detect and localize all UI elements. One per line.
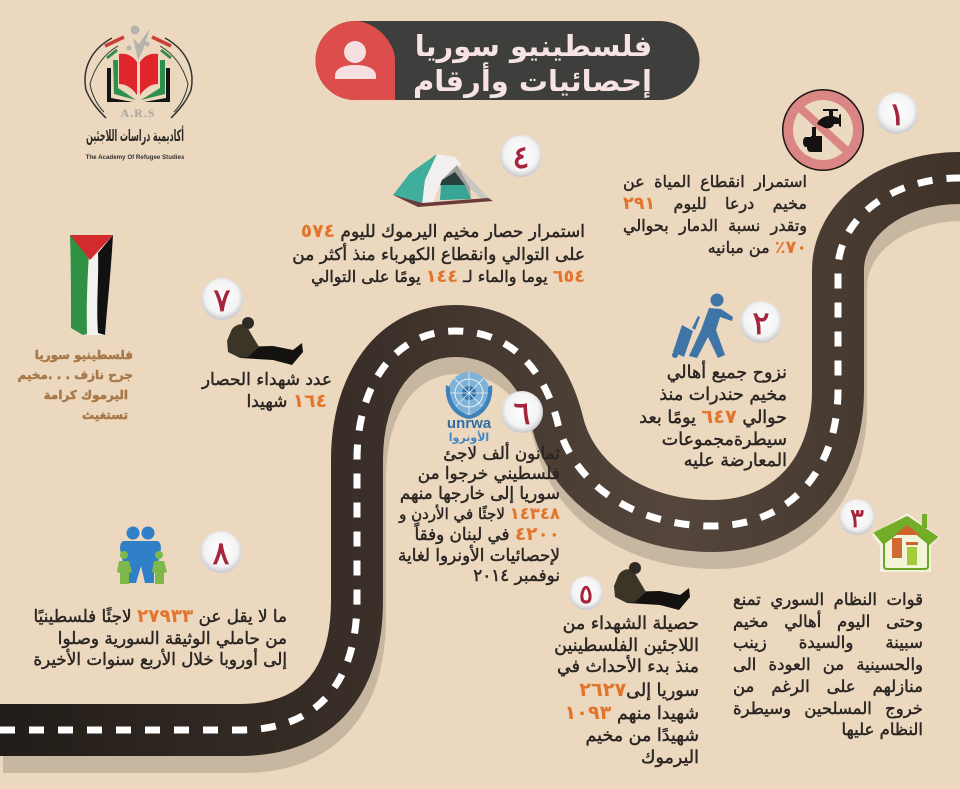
- text block 1: وتقدر نسبة الدمار بحوالي: [623, 216, 807, 235]
- text block 3: منازلهم على الرغم من: [733, 677, 923, 696]
- text block 1: استمرار انقطاع المياة عن: [623, 172, 807, 191]
- icon: fallen man 7: [227, 317, 303, 365]
- text block 5: [554, 614, 699, 768]
- flag caption: جرح نازف . . .مخيم: [18, 368, 133, 382]
- text block 2: [639, 360, 787, 471]
- badge 1: ١: [888, 95, 906, 133]
- text block 8: إلى أوروبا خلال الأربع سنوات الأخيرة: [33, 649, 287, 669]
- text block 6: فلسطيني خرجوا من: [418, 463, 560, 483]
- text block 6: ثمانون ألف لاجئ: [443, 443, 560, 463]
- icon: user on red circle: [316, 21, 395, 100]
- badge 3: ٣: [850, 504, 864, 534]
- text block 6: [398, 442, 560, 586]
- UNRWA wordmark: unrwa: [447, 415, 492, 432]
- badge 1: [876, 92, 918, 134]
- text block 3: [733, 590, 923, 740]
- badge 6: ٦: [513, 394, 531, 432]
- badge 4: [500, 135, 542, 177]
- road: [0, 178, 960, 747]
- text block 1: [623, 172, 807, 258]
- text block 8: ما لا يقل عن ٢٧٩٣٣ لاجئًا فلسطينيًا: [34, 606, 287, 627]
- badge 2: ٢: [752, 304, 770, 342]
- text block 6: نوفمبر ٢٠١٤: [473, 565, 560, 585]
- text block 5: منذ بدء الأحداث في: [557, 657, 699, 677]
- text block 5: شهيدًا من مخيم: [586, 726, 699, 746]
- text block 5: شهيدا منهم ١٠٩٣: [564, 701, 699, 724]
- icon: UNRWA logo: [446, 372, 492, 444]
- text block 5: حصيلة الشهداء من: [563, 614, 699, 634]
- flag caption: اليرموك كرامة: [44, 388, 128, 402]
- text block 8: [33, 606, 287, 670]
- text block 2: المعارضة عليه: [684, 451, 787, 471]
- title line two: إحصائيات وأرقام: [413, 64, 652, 98]
- title pill: [316, 21, 700, 100]
- icon: tent: [393, 154, 493, 207]
- icon: person with suitcase: [672, 294, 733, 358]
- text block 6: ٤٢٠٠ في لبنان وفقاً: [414, 524, 560, 545]
- text block 8: من حاملي الوثيقة السورية وصلوا: [58, 628, 287, 648]
- icon: fallen man 5: [614, 562, 690, 610]
- badge 6: [501, 391, 543, 433]
- UNRWA Arabic wordmark: الأونروا: [449, 430, 489, 444]
- logo english name: The Academy Of Refugee Studies: [86, 154, 185, 161]
- icon: house: [872, 513, 940, 572]
- text block 3: سبينة والسيدة زينب: [733, 633, 923, 652]
- flag caption: [18, 348, 133, 422]
- text block 5: اليرموك: [641, 748, 699, 768]
- logo calligraphy: أكاديمية دراسات اللاجئين: [86, 125, 184, 145]
- text block 2: مخيم حندرات منذ: [659, 384, 787, 404]
- text block 3: النظام عليها: [841, 720, 923, 739]
- title line one: فلسطينيو سوريا: [415, 29, 652, 63]
- text block 3: وحتى اليوم أهالي مخيم: [733, 612, 923, 631]
- text block 7: [200, 370, 332, 412]
- badge 7: [201, 278, 243, 320]
- text block 2: نزوح جميع أهالي: [667, 363, 787, 383]
- text block 2: حوالي ٦٤٧ يومًا بعد: [639, 405, 787, 428]
- text block 5: اللاجئين الفلسطينين: [554, 636, 699, 656]
- badge 5: [569, 576, 603, 610]
- badge 8: [200, 531, 242, 573]
- badge 5: ٥: [579, 580, 593, 610]
- icon: palestinian flag: [70, 235, 113, 335]
- text block 6: لإحصائيات الأونروا لغاية: [398, 545, 560, 565]
- text block 3: والحسينية من العودة الى: [733, 655, 923, 674]
- text block 4: استمرار حصار مخيم اليرموك لليوم ٥٧٤: [301, 221, 585, 242]
- logo initials: A.R.S: [120, 106, 156, 120]
- badge 4: ٤: [512, 138, 530, 176]
- text block 1: مخيم درعا لليوم ٢٩١: [623, 194, 807, 214]
- text block 1: ٧٠٪ من مبانيه: [708, 238, 807, 258]
- badge 7: ٧: [213, 281, 231, 319]
- text block 4: على التوالي وانقطاع الكهرباء منذ أكثر من: [292, 244, 585, 264]
- text block 5: سوريا إلى٢٦٢٧: [579, 678, 699, 701]
- badge 8: ٨: [212, 534, 230, 572]
- icon: family: [117, 526, 167, 584]
- text block 3: قوات النظام السوري تمنع: [733, 590, 923, 609]
- badge 2: [740, 301, 782, 343]
- text block 2: سيطرةمجموعات: [662, 430, 787, 450]
- text block 3: خروج المسلحين وسيطرة: [733, 699, 923, 718]
- icon: no water: [782, 89, 864, 171]
- flag caption: تستغيث: [82, 408, 128, 422]
- text block 4: ٦٥٤ يوما والماء لـ ١٤٤ يومًا على التوالي: [311, 267, 585, 287]
- flag caption: فلسطينيو سوريا: [35, 348, 133, 362]
- text block 7: ١٦٤ شهيدا: [247, 391, 327, 412]
- text block 6: ١٤٣٤٨ لاجئًا في الأردن و: [399, 504, 560, 523]
- text block 4: [292, 221, 585, 287]
- badge 3: [839, 499, 875, 535]
- text block 7: عدد شهداء الحصار: [202, 370, 332, 390]
- text block 6: سوريا إلى خارجها منهم: [400, 483, 560, 503]
- logo: [85, 26, 192, 161]
